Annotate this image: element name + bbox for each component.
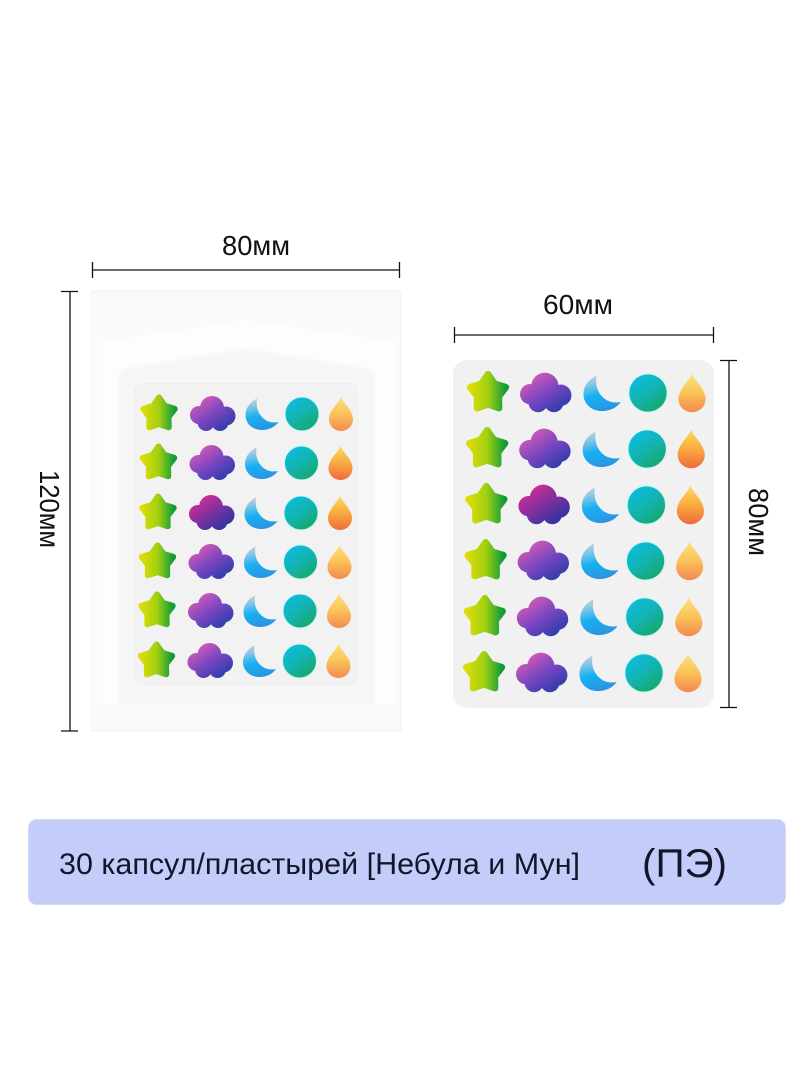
right row 1	[470, 373, 706, 412]
left row 1	[143, 396, 353, 431]
dimension arrow: left height	[61, 292, 78, 731]
packaging top flap	[97, 320, 397, 704]
sheet background	[453, 360, 714, 708]
right row 5	[467, 597, 702, 636]
label: 120mm height: 120мм	[34, 470, 65, 548]
left row 6	[141, 643, 350, 678]
packaging blister house shape	[118, 348, 375, 705]
right row 4	[468, 541, 703, 580]
left row 4	[142, 544, 352, 579]
left row 5	[141, 593, 351, 628]
right row 2	[469, 429, 705, 468]
bar background	[28, 820, 786, 904]
material label: (ПЭ)	[642, 842, 727, 886]
left row 2	[143, 445, 352, 480]
right row 6	[466, 653, 702, 692]
dimension arrow: right height	[720, 360, 737, 708]
label: 80mm height: 80мм	[743, 488, 774, 556]
panel: right patch sheet	[453, 360, 714, 708]
dimension arrow: left width	[92, 262, 400, 278]
packaging outer sleeve	[92, 291, 401, 731]
label: 60mm width: 60мм	[543, 289, 613, 320]
panel: left packaged patch sheet	[92, 291, 401, 731]
dimension arrow: right width	[454, 327, 714, 343]
left row 3	[142, 495, 352, 530]
product name text: 30 капсул/пластырей [Небула и Мун]	[59, 848, 580, 881]
label: 80mm width: 80мм	[222, 230, 290, 261]
patch window	[132, 381, 360, 687]
right row 3	[469, 485, 704, 524]
product name bar	[28, 820, 786, 904]
